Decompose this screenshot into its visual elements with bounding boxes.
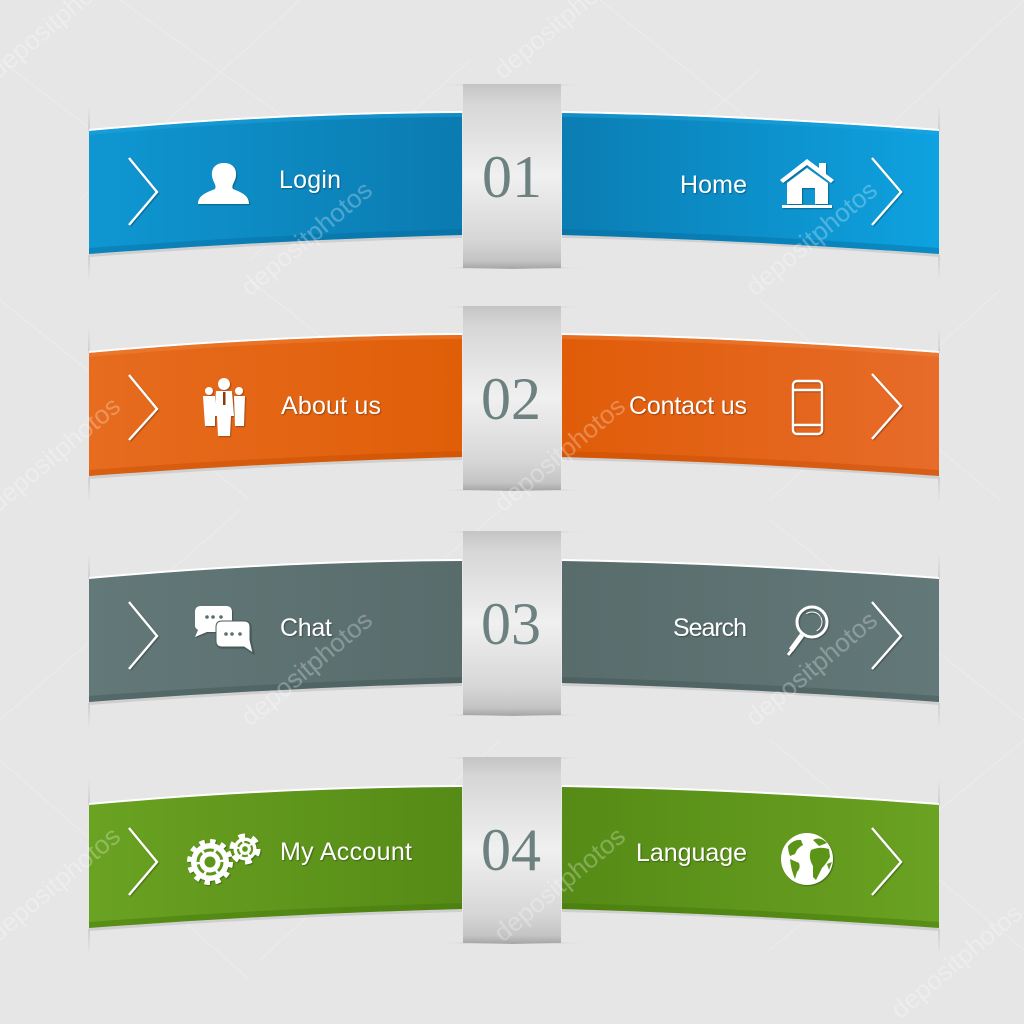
ribbon: Contact us	[562, 334, 939, 478]
label: Contact us: Contact us	[629, 392, 747, 420]
tab: 02: 02	[481, 366, 541, 432]
tab: 03: 03	[481, 591, 541, 657]
icon: globe	[781, 833, 833, 885]
watermark text: depositphotos	[740, 175, 883, 302]
tab: 01	[435, 84, 590, 269]
tab: 01: 01	[482, 144, 542, 210]
label: Language: Language	[636, 839, 747, 867]
ribbon: Login	[89, 112, 462, 256]
watermark text: depositphotos	[235, 175, 378, 302]
icon: gears	[190, 836, 258, 882]
icon: chat bubbles	[195, 606, 253, 653]
label: My Account: My Account	[280, 838, 412, 866]
icon: house	[780, 159, 834, 208]
ribbon: About us	[89, 334, 462, 478]
label: Home: Home	[680, 171, 747, 199]
icon: team	[203, 378, 245, 436]
watermark text: depositphotos	[488, 391, 631, 518]
label: Login: Login	[279, 166, 341, 194]
ribbon: Chat	[89, 560, 462, 704]
tab: 03	[435, 531, 590, 716]
icon: phone	[793, 381, 822, 434]
watermark text: depositphotos	[235, 605, 378, 732]
row 4: green	[89, 757, 939, 944]
ribbon: Language	[562, 786, 939, 930]
icon: user	[198, 163, 249, 204]
icon: magnifier	[788, 607, 827, 655]
ribbon: My Account	[89, 786, 462, 930]
row 1: blue	[89, 84, 939, 269]
ribbon: Search	[562, 560, 939, 704]
watermark text: depositphotos	[488, 821, 631, 948]
label: About us: About us	[281, 392, 381, 420]
watermark text: depositphotos	[740, 605, 883, 732]
tab: 02	[435, 306, 590, 491]
ribbon: Home	[562, 112, 939, 256]
tab: 04	[435, 757, 590, 944]
label: Chat: Chat	[280, 614, 332, 642]
row 3: grey	[89, 531, 939, 716]
ribbon edge ticks	[88, 105, 940, 955]
tab: 04: 04	[481, 817, 541, 883]
row 2: orange	[89, 306, 939, 491]
label: Search: Search	[673, 614, 747, 642]
